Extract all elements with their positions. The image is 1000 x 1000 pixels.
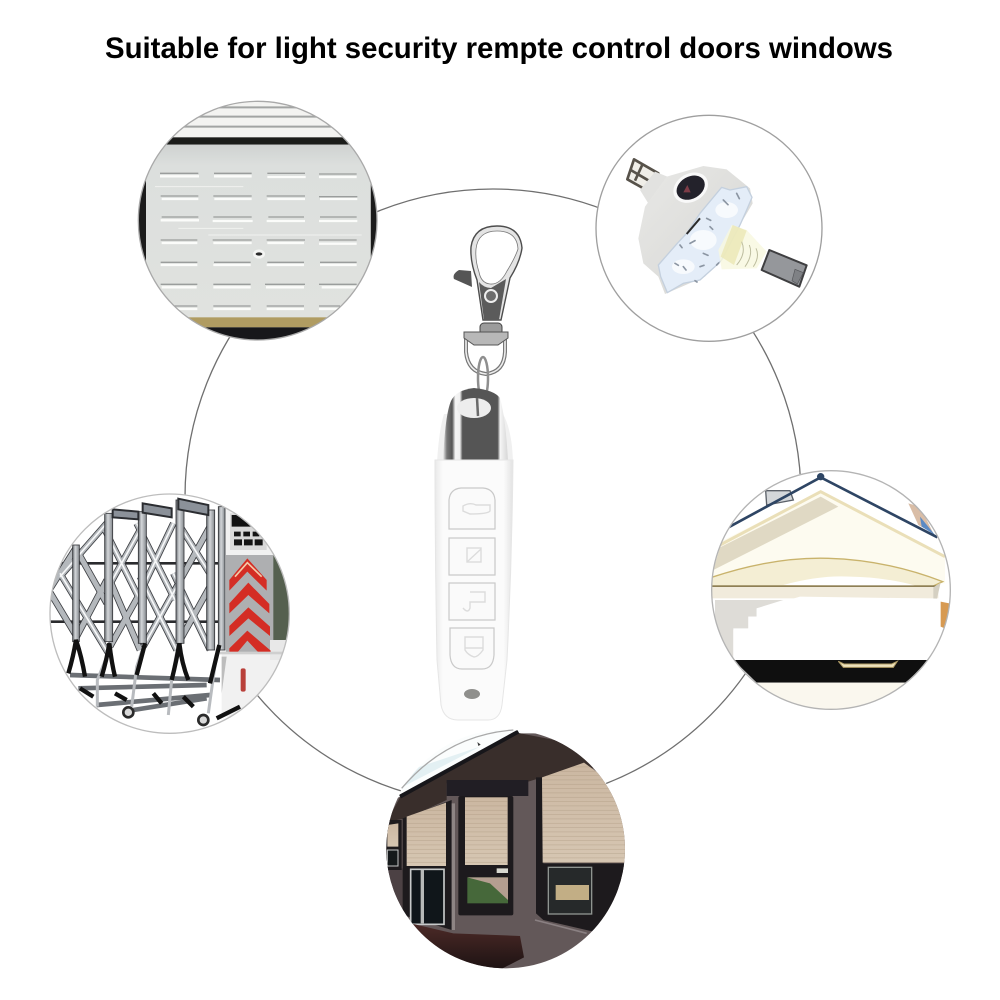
roof ridge line <box>727 477 937 537</box>
chrome cap <box>437 388 513 462</box>
remote signal waves <box>718 225 767 269</box>
window frames <box>383 777 640 932</box>
gate lower frame <box>70 675 220 710</box>
button icons <box>463 504 490 657</box>
split ring <box>478 357 488 399</box>
led indicator <box>464 689 480 699</box>
black threshold <box>733 660 928 683</box>
roller blinds <box>387 763 640 866</box>
remote buttons <box>449 488 495 669</box>
clasp hook <box>471 226 522 320</box>
clasp lever <box>454 270 472 287</box>
gate posts <box>73 500 225 650</box>
panel: remote control lamp <box>596 115 822 341</box>
white garage door <box>715 600 783 660</box>
panel: garage door <box>138 100 378 341</box>
gate top handles <box>113 499 208 519</box>
panel: folding gate <box>37 493 298 734</box>
door handle <box>838 661 897 667</box>
window glass <box>387 850 592 924</box>
house wall <box>386 733 625 968</box>
dormer window <box>766 491 935 535</box>
lamp sensor <box>674 172 708 203</box>
lamp screw base <box>626 158 666 202</box>
title: Suitable for light security rempte control doors windows <box>105 32 893 65</box>
key clasp <box>454 226 522 416</box>
connecting ring <box>185 189 801 805</box>
clasp swivel <box>480 323 502 335</box>
gable <box>712 492 945 583</box>
button 2 <box>449 538 495 575</box>
button 1 <box>449 488 495 529</box>
gate wheels <box>123 707 208 725</box>
lamp LED face <box>658 187 752 293</box>
panel: house roof garage <box>711 470 951 713</box>
door embossed slots <box>160 173 357 309</box>
panel: roller shutter windows <box>386 729 625 968</box>
small remote <box>762 250 807 287</box>
lamp housing <box>638 166 753 294</box>
d-ring <box>466 334 505 374</box>
remote body <box>435 460 513 720</box>
lower roof <box>413 924 524 968</box>
button 3 <box>449 583 495 620</box>
arched cornice <box>712 558 943 586</box>
button 4 <box>450 628 494 669</box>
gate lattice <box>37 523 223 653</box>
gate right panel <box>220 509 289 716</box>
remote control <box>435 226 522 720</box>
left lower wall <box>388 868 404 910</box>
soffit <box>390 733 594 821</box>
